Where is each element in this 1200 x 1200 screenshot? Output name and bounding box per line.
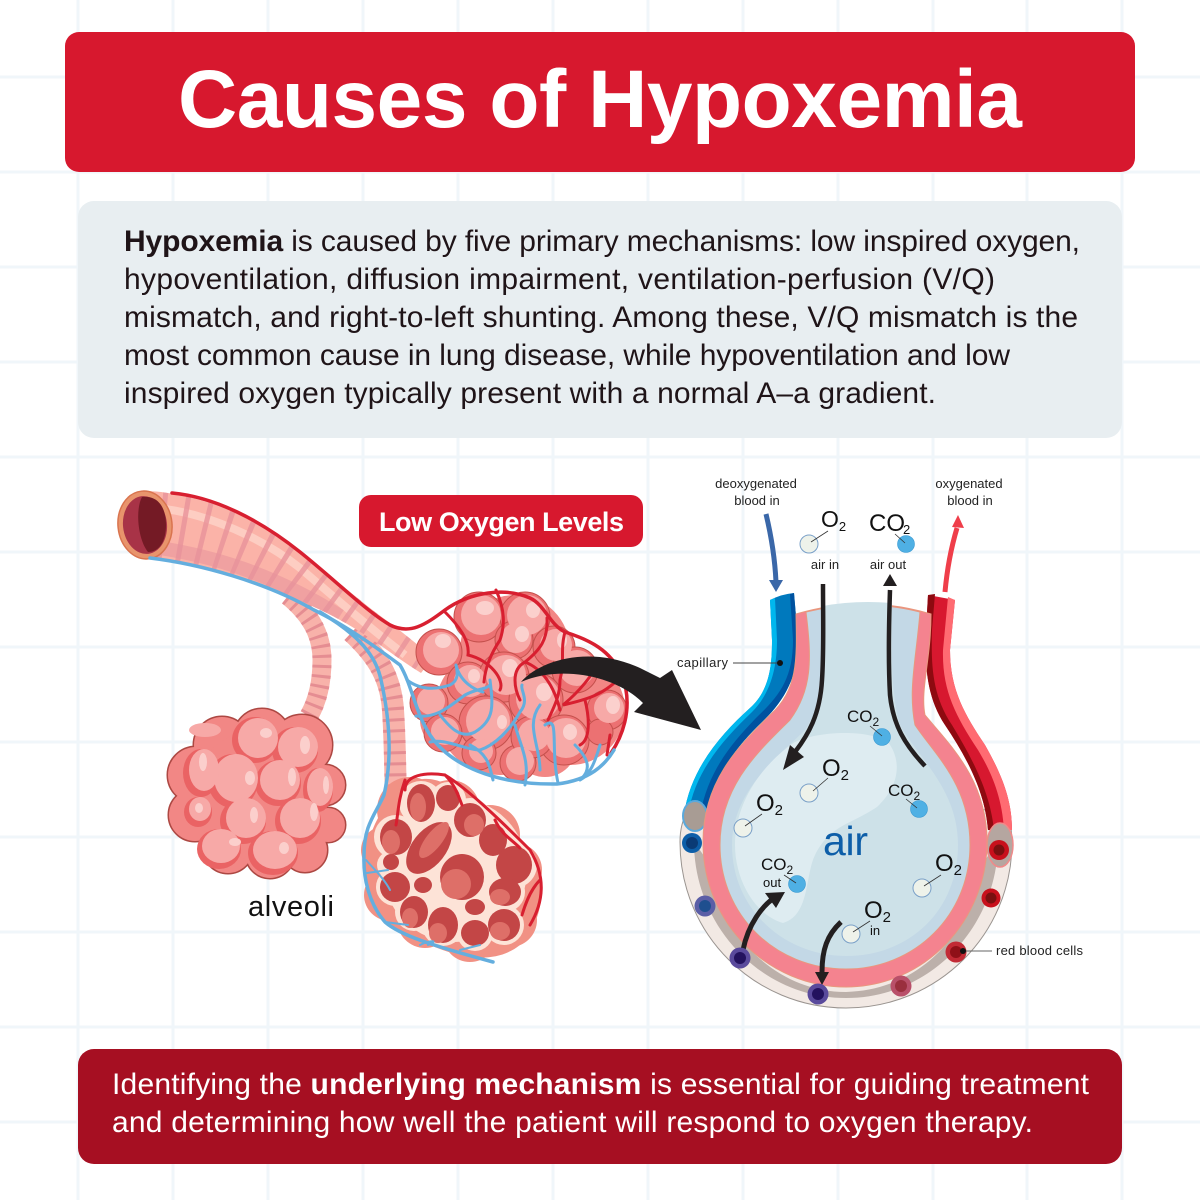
- molecule labels: 2: [914, 789, 920, 803]
- molecule labels: O: [864, 897, 883, 924]
- molecule labels: 2: [954, 862, 962, 879]
- big arrow to diagram: [521, 656, 701, 730]
- air highlight: [735, 733, 897, 923]
- molecule labels: in: [870, 923, 880, 938]
- molecule labels: CO: [888, 781, 914, 800]
- outer interstitial space: [680, 780, 1012, 1008]
- molecule labels: O: [821, 506, 839, 532]
- molecule labels: 2: [786, 863, 794, 877]
- intro text: inspired oxygen typically present with a normal A–a gradient.: [124, 377, 936, 410]
- alveolus air space: [720, 605, 970, 969]
- molecule labels: out: [763, 875, 781, 890]
- label pill: low oxygen levels: [359, 495, 643, 547]
- intro text: hypoventilation, diffusion impairment, ventilation-perfusion (V/Q): [124, 263, 995, 296]
- alveolar wall: [703, 604, 987, 987]
- labels: blood in: [947, 493, 993, 508]
- intro text: most common cause in lung disease, while hypoventilation and low: [124, 339, 1010, 372]
- molecule labels: O: [935, 850, 954, 877]
- molecule labels: 2: [883, 909, 891, 926]
- inner air layer: [732, 602, 958, 956]
- labels: air out: [870, 557, 906, 572]
- red blood cells: [682, 833, 1009, 1004]
- labels: capillary: [677, 655, 728, 670]
- molecule labels: CO: [847, 707, 872, 726]
- panel: conclusion: [78, 1049, 1122, 1164]
- labels: oxygenated: [935, 476, 1003, 491]
- molecule labels: CO: [869, 510, 905, 537]
- conclusion text: and determining how well the patient will respond to oxygen therapy.: [112, 1106, 1033, 1139]
- molecule labels: O: [822, 755, 841, 782]
- label pill: low oxygen levels: Low Oxygen Levels: [379, 507, 624, 537]
- arrow: O2 in: [815, 922, 841, 985]
- intro text: Hypoxemia is caused by five primary mechanisms: low inspired oxygen,: [124, 225, 1080, 258]
- molecule labels: 2: [839, 519, 846, 534]
- arrow: air out: [883, 574, 925, 766]
- title banner: [65, 32, 1135, 172]
- capillary shadow: [694, 842, 998, 998]
- intro text: [124, 225, 1080, 410]
- alveoli cluster: with capillaries: [410, 592, 627, 781]
- labels: red blood cells: [996, 943, 1084, 958]
- molecule labels: 2: [775, 802, 783, 819]
- illustration: bronchial tree and alveoli: [115, 488, 627, 962]
- molecule leader lines: [745, 531, 941, 932]
- carbon dioxide molecules: [788, 536, 928, 892]
- diagram: gas exchange in an alveolus: [677, 476, 1084, 1008]
- molecule labels: 2: [841, 767, 849, 784]
- title: Causes of Hypoxemia: [178, 54, 1023, 145]
- arrow: oxygenated blood: [945, 515, 964, 592]
- labels: deoxygenated: [715, 476, 797, 491]
- alveoli cluster: cross-section: [361, 777, 542, 962]
- molecule labels: CO: [761, 855, 786, 874]
- red capillary: [926, 594, 1013, 867]
- alveoli cluster: plain: [168, 709, 345, 878]
- branch bronchus to section cluster: [352, 632, 396, 800]
- arrow: CO2 out: [743, 892, 785, 950]
- label: alveoli: alveoli: [248, 891, 334, 923]
- labels: blood in: [734, 493, 780, 508]
- molecule labels: 2: [872, 715, 880, 729]
- conclusion text: Identifying the underlying mechanism is essential for guiding treatment: [112, 1068, 1090, 1101]
- oxygen molecules: [734, 535, 931, 943]
- blood vessels: [150, 493, 627, 962]
- arrow: air in: [783, 584, 823, 770]
- labels: [677, 476, 1084, 958]
- molecule labels: [756, 506, 962, 938]
- air label: air: [823, 818, 868, 864]
- pointer: red blood cells: [960, 948, 992, 954]
- intro text: mismatch, and right-to-left shunting. Among these, V/Q mismatch is the: [124, 301, 1078, 334]
- molecule labels: 2: [903, 522, 910, 537]
- molecule labels: O: [756, 790, 775, 817]
- blue capillary: [683, 593, 798, 831]
- labels: air in: [811, 557, 839, 572]
- panel: introduction: [78, 201, 1122, 438]
- arrow: deoxygenated blood: [766, 514, 783, 592]
- main bronchus tube: [115, 488, 425, 673]
- side bronchus to alveoli cluster: [288, 596, 322, 716]
- conclusion text: [112, 1068, 1090, 1139]
- pointer: capillary: [733, 660, 783, 666]
